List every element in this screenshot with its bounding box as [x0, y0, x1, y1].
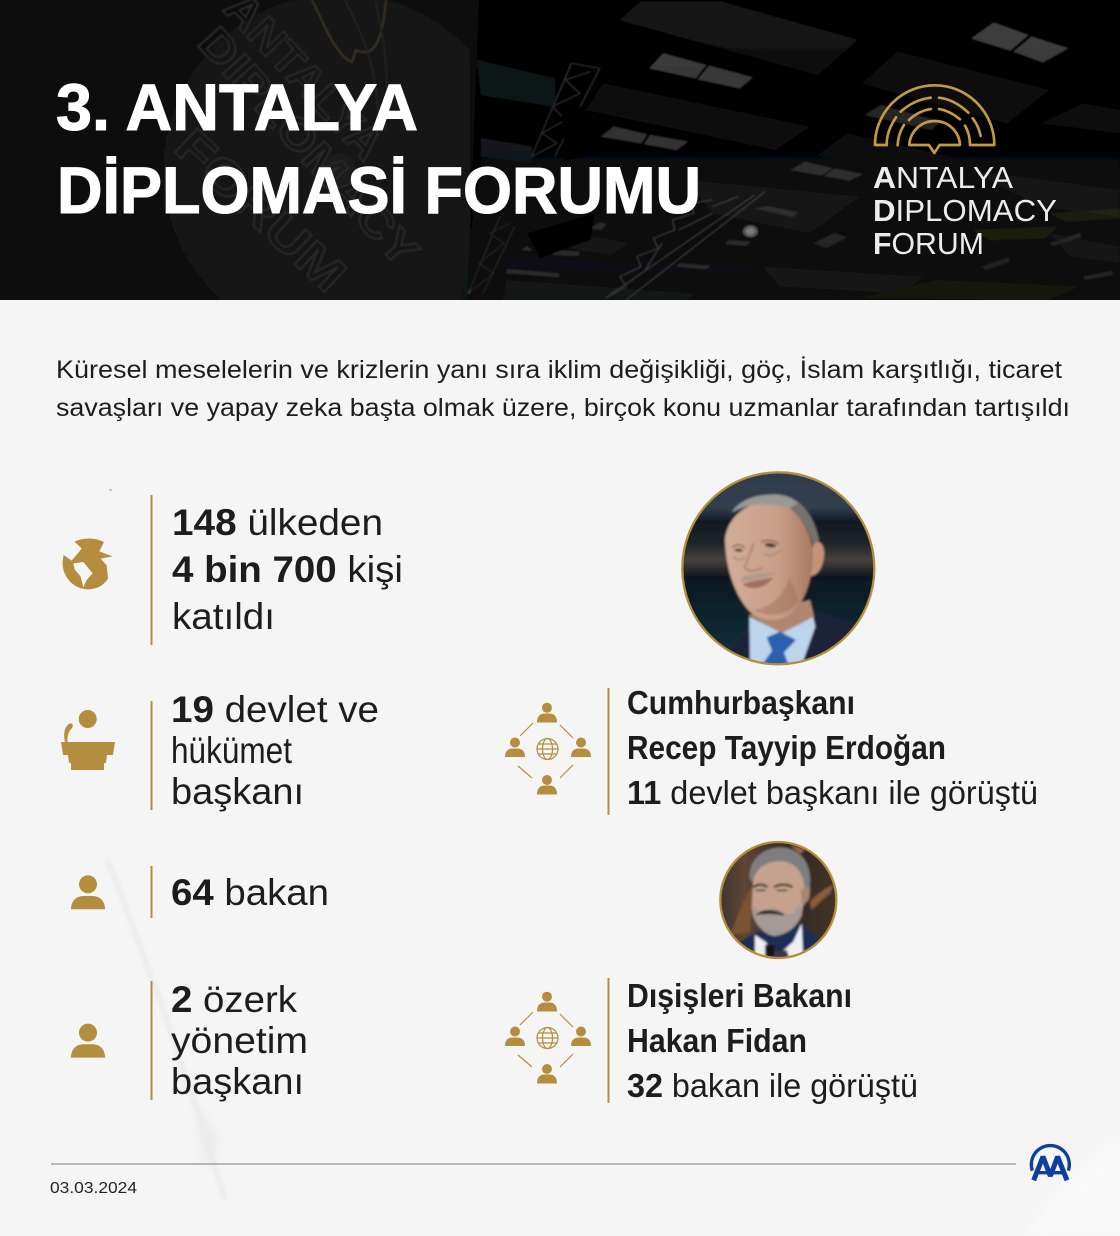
icon: person [71, 1024, 105, 1058]
stat text [171, 689, 379, 812]
stat text: başkanı [171, 1061, 304, 1102]
intro text [56, 355, 1070, 422]
stat text: 4 bin 700 kişi [172, 549, 403, 590]
header photo [0, 0, 1120, 305]
wall lettering in photo [164, 0, 428, 303]
stat: 148 countries [63, 495, 403, 645]
meeting text [627, 977, 918, 1104]
title: 3. ANTALYA [56, 70, 418, 144]
meeting text: 11 devlet başkanı ile görüştü [627, 774, 1038, 811]
title [56, 70, 701, 227]
logo wordmark: DIPLOMACY [873, 193, 1057, 228]
icon: podium speaker [61, 710, 115, 770]
stat text [172, 502, 403, 637]
title: DİPLOMASİ FORUMU [57, 153, 701, 227]
icon: globe [63, 538, 113, 589]
stat text: 148 ülkeden [172, 502, 383, 543]
logo: Antalya Diplomacy Forum [873, 85, 1057, 261]
stat text: yönetim [171, 1020, 308, 1061]
stat: 19 heads of state [61, 689, 379, 812]
stat: 64 ministers [71, 866, 329, 918]
icon: network of people around globe [505, 992, 591, 1084]
logo wordmark [873, 160, 1057, 261]
stat text [171, 979, 308, 1102]
stat text: 19 devlet ve [171, 689, 379, 730]
wall lettering in photo: FORUM [164, 119, 356, 303]
stat text: katıldı [172, 596, 275, 637]
intro text: Küresel meselelerin ve krizlerin yanı sıra iklim değişikliği, göç, İslam karşıtlığı, ticaret [56, 355, 1062, 384]
icon: Anadolu Agency logo [1031, 1146, 1069, 1180]
icon: person [71, 875, 105, 909]
footer [50, 1146, 1069, 1197]
logo wordmark: ANTALYA [873, 160, 1013, 195]
portrait: Erdoğan [677, 467, 880, 670]
ceiling panels and truss [460, 2, 1120, 305]
stat text: hükümet [171, 730, 293, 771]
meeting: Fidan [505, 977, 918, 1104]
meeting text: Dışişleri Bakanı [627, 977, 852, 1014]
intro text: savaşları ve yapay zeka başta olmak üzere, birçok konu uzmanlar tarafından tartışıldı [56, 394, 1070, 422]
meeting text: Cumhurbaşkanı [627, 684, 855, 721]
meeting: Erdoğan [505, 684, 1038, 815]
meeting text [627, 684, 1038, 811]
meeting text: 32 bakan ile görüştü [627, 1067, 918, 1104]
wall lettering in photo: DIPLOMACY [189, 18, 428, 277]
stat: 2 autonomous leaders [71, 979, 308, 1102]
logo wordmark: FORUM [873, 226, 984, 261]
meeting text: Recep Tayyip Erdoğan [627, 729, 946, 766]
meeting text: Hakan Fidan [627, 1022, 807, 1059]
icon: network of people around globe [505, 703, 591, 794]
stat text: 64 bakan [171, 872, 329, 913]
logo arch mark [875, 85, 994, 153]
stat text: başkanı [171, 771, 304, 812]
date: 03.03.2024 [50, 1180, 137, 1197]
portrait: Fidan [717, 838, 840, 962]
stat text: 2 özerk [171, 979, 298, 1020]
